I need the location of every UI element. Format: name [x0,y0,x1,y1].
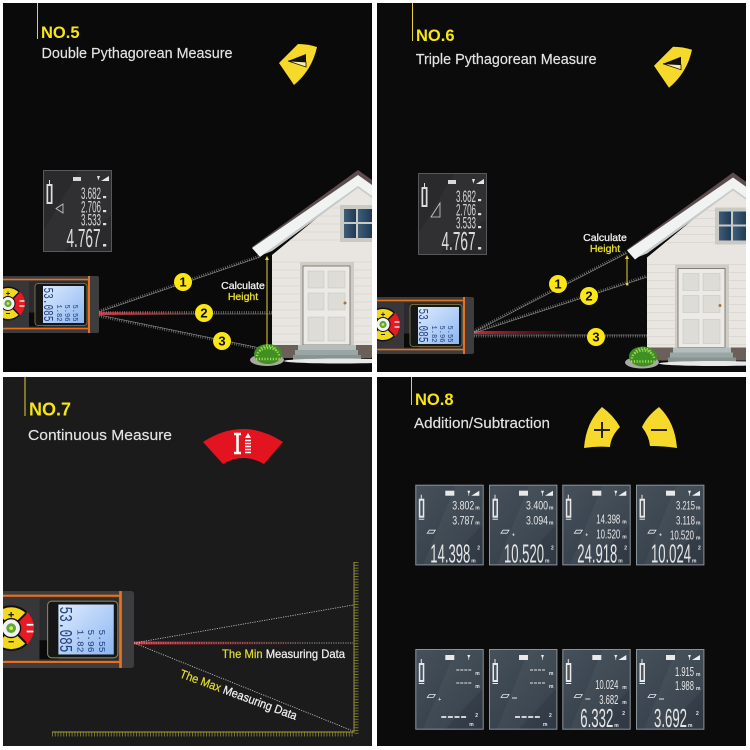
panel: NO.8 addition and subtraction [377,377,746,746]
number badges 1 2 3 [174,273,231,350]
house [625,172,750,368]
LCD: 1.915 1.988 3.692: 2 [696,711,699,717]
panel: NO.6 triple Pythagorean measure [344,3,750,372]
heading: NO.6 [412,3,597,68]
LCD: 3.400 3.094 10.520: 2 [551,546,554,552]
rulers: three measured lines [474,252,647,336]
LCD: 10.024 3.682 6.332: m [622,700,627,706]
label: Calculate Height: Calculate [583,232,627,244]
LCD: 3.802 3.787 14.398: m [475,521,480,527]
label: Calculate Height: Height [228,291,258,303]
device: laser distance meter: 53.085 [54,607,76,652]
LCD readout: 3.682 2.706 3.533 4.767: 3.682 [81,185,101,203]
LCD readout: 3.682 2.706 3.533 4.767: 3.682 [456,188,476,206]
LCD readout: 3.682 2.706 3.533 4.767: 3.533 [456,215,476,233]
house [250,170,372,366]
LCD: 1.915 1.988 3.692: 1.988 [675,678,694,693]
label: The Min Measuring Data: The Min Measuring Data [222,647,345,661]
LCD: blank addition: m [469,722,474,728]
LCD: 10.024 3.682 6.332 [563,650,630,733]
number badges 1 2 3: 1 [179,274,187,290]
LCD: 14.398 10.520 24.918: m [622,535,627,541]
LCD: 1.915 1.988 3.692: m [696,686,701,692]
LCD: 3.215 3.118 10.520 10.024: m [696,536,701,542]
LCD: 3.215 3.118 10.520 10.024 [636,485,704,569]
heading: NO.6: NO.6 [416,27,455,45]
LCD: blank subtraction [490,650,557,729]
wall and floor [52,562,356,735]
heading: NO.8: Addition/Subtraction [414,415,550,432]
LCD: 10.024 3.682 6.332: 6.332 [580,703,613,733]
device: laser distance meter: 53.085 [414,308,430,342]
device: laser distance meter: 5.55 [70,304,78,322]
LCD: 3.215 3.118 10.520 10.024: + [659,533,662,539]
LCD: 1.915 1.988 3.692 [636,650,704,733]
number badges 1 2 3: 3 [592,330,600,344]
label: Calculate Height: Height [590,243,620,255]
LCD: 14.398 10.520 24.918: 10.520 [596,527,620,542]
icon: triple Pythagorean button [654,47,692,88]
arrow: calculated height [265,256,269,345]
heading: NO.6: Triple Pythagorean Measure [416,51,597,68]
heading: NO.5: NO.5 [41,24,80,42]
heading: NO.7 [25,377,172,444]
label: Calculate Height: Calculate [221,280,265,292]
LCD: 1.915 1.988 3.692: m [696,672,701,678]
LCD: 3.400 3.094 10.520: 10.520 [504,539,544,569]
LCD readout: 3.682 2.706 3.533 4.767 [418,174,486,256]
LCD: 3.400 3.094 10.520: + [512,533,515,539]
LCD: 3.802 3.787 14.398: 3.802 [452,499,475,513]
LCD: 3.215 3.118 10.520 10.024: 10.520 [670,528,694,543]
LCD: 10.024 3.682 6.332: 10.024 [595,677,618,692]
LCD: 3.400 3.094 10.520: m [549,506,554,512]
LCD: 3.215 3.118 10.520 10.024: m [696,506,701,512]
LCD: 14.398 10.520 24.918: 2 [624,546,627,552]
LCD: 1.915 1.988 3.692: m [688,723,693,729]
number badges 1 2 3: 2 [585,288,593,304]
device: laser distance meter [377,297,474,354]
LCD: blank subtraction: m [549,684,554,690]
LCD: 3.400 3.094 10.520 [490,485,557,569]
LCD: 3.802 3.787 14.398: 3.787 [452,514,475,528]
device: laser distance meter [0,591,134,668]
LCD: 3.802 3.787 14.398: m [471,559,476,565]
laser rays: min and max [134,605,353,731]
LCD readout: 3.682 2.706 3.533 4.767 [44,170,112,253]
icon: plus button [584,407,620,448]
LCD: 3.400 3.094 10.520: m [545,559,550,565]
icon: double Pythagorean button [279,44,317,85]
LCD: 3.802 3.787 14.398: 14.398 [430,539,470,569]
label: Calculate Height [583,232,627,255]
number badges 1 2 3: 1 [554,276,562,292]
LCD: 3.215 3.118 10.520 10.024: m [696,521,701,527]
heading: NO.5: Double Pythagorean Measure [42,45,232,62]
device: laser distance meter: 5.96 [62,304,70,322]
arrow: calculated height [625,255,629,285]
LCD: 3.802 3.787 14.398: m [475,506,480,512]
device: laser distance meter [0,276,99,333]
LCD: blank addition: m [475,684,480,690]
LCD: 14.398 10.520 24.918: m [622,520,627,526]
LCD: 3.400 3.094 10.520: 3.400 [526,499,548,513]
heading: NO.5 [38,3,232,62]
icon: minus button [642,407,677,448]
LCD: 10.024 3.682 6.332: 3.682 [599,692,618,707]
panel: NO.7 continuous measure [0,377,372,746]
LCD: 14.398 10.520 24.918: + [585,533,588,539]
device: laser distance meter: 5.55 [445,326,453,342]
LCD: 1.915 1.988 3.692: 3.692 [654,703,687,733]
heading: NO.7: NO.7 [29,400,71,420]
LCD: 3.215 3.118 10.520 10.024: m [692,559,697,565]
LCD: blank addition: 2 [475,713,478,719]
LCD readout: 3.682 2.706 3.533 4.767: 2.706 [456,201,476,219]
heading: NO.8 [412,377,550,432]
LCD: blank addition [416,650,483,729]
label: Calculate Height [221,280,265,303]
heading: NO.7: Continuous Measure [28,427,172,444]
LCD: 3.215 3.118 10.520 10.024: 10.024 [651,539,691,569]
LCD: 1.915 1.988 3.692: 1.915 [675,664,694,679]
number badges 1 2 3 [549,275,605,346]
device: laser distance meter: 53.085 [39,288,55,322]
device: laser distance meter: 5.96 [85,630,96,653]
LCD readout: 3.682 2.706 3.533 4.767: 2.706 [81,198,101,216]
heading: NO.8: NO.8 [415,391,454,409]
LCD: 14.398 10.520 24.918: 24.918 [577,539,617,569]
LCD: 3.802 3.787 14.398: 2 [477,546,480,552]
LCD: 3.215 3.118 10.520 10.024: 2 [698,546,701,552]
panel: NO.5 double Pythagorean measure [0,3,396,372]
LCD: blank subtraction: 2 [549,713,552,719]
LCD: blank addition: m [475,671,480,677]
LCD: 14.398 10.520 24.918: m [618,559,623,565]
device: laser distance meter: 5.55 [96,630,107,653]
LCD: 14.398 10.520 24.918 [563,485,630,569]
LCD: 3.802 3.787 14.398 [416,485,483,569]
LCD: 10.024 3.682 6.332: 2 [622,711,625,717]
device: laser distance meter: 1.82 [429,326,437,342]
LCD: blank subtraction: m [543,722,548,728]
number badges 1 2 3: 2 [200,306,208,320]
icon: continuous measure button [203,429,283,464]
rulers: three measured lines [99,256,272,349]
LCD: 14.398 10.520 24.918: 14.398 [596,512,620,527]
LCD: 3.400 3.094 10.520: 3.094 [526,514,548,528]
LCD readout: 3.682 2.706 3.533 4.767: 4.767 [442,226,476,256]
LCD readout: 3.682 2.706 3.533 4.767: 4.767 [66,223,100,253]
device: laser distance meter: 5.96 [437,326,445,342]
LCD: 3.215 3.118 10.520 10.024: 3.215 [676,499,695,513]
device: laser distance meter: 1.82 [54,304,62,322]
number badges 1 2 3: 3 [218,334,226,348]
device: laser distance meter: 1.82 [74,630,85,652]
LCD readout: 3.682 2.706 3.533 4.767: 3.533 [81,212,101,230]
LCD: blank addition: + [438,697,441,703]
LCD: 3.215 3.118 10.520 10.024: 3.118 [676,514,695,528]
LCD: 10.024 3.682 6.332: m [622,685,627,691]
LCD: 10.024 3.682 6.332: m [614,723,619,729]
label: The Max Measuring Data: The Max Measuring Data [178,667,299,723]
LCD: 3.400 3.094 10.520: m [549,521,554,527]
LCD: blank subtraction: m [549,671,554,677]
